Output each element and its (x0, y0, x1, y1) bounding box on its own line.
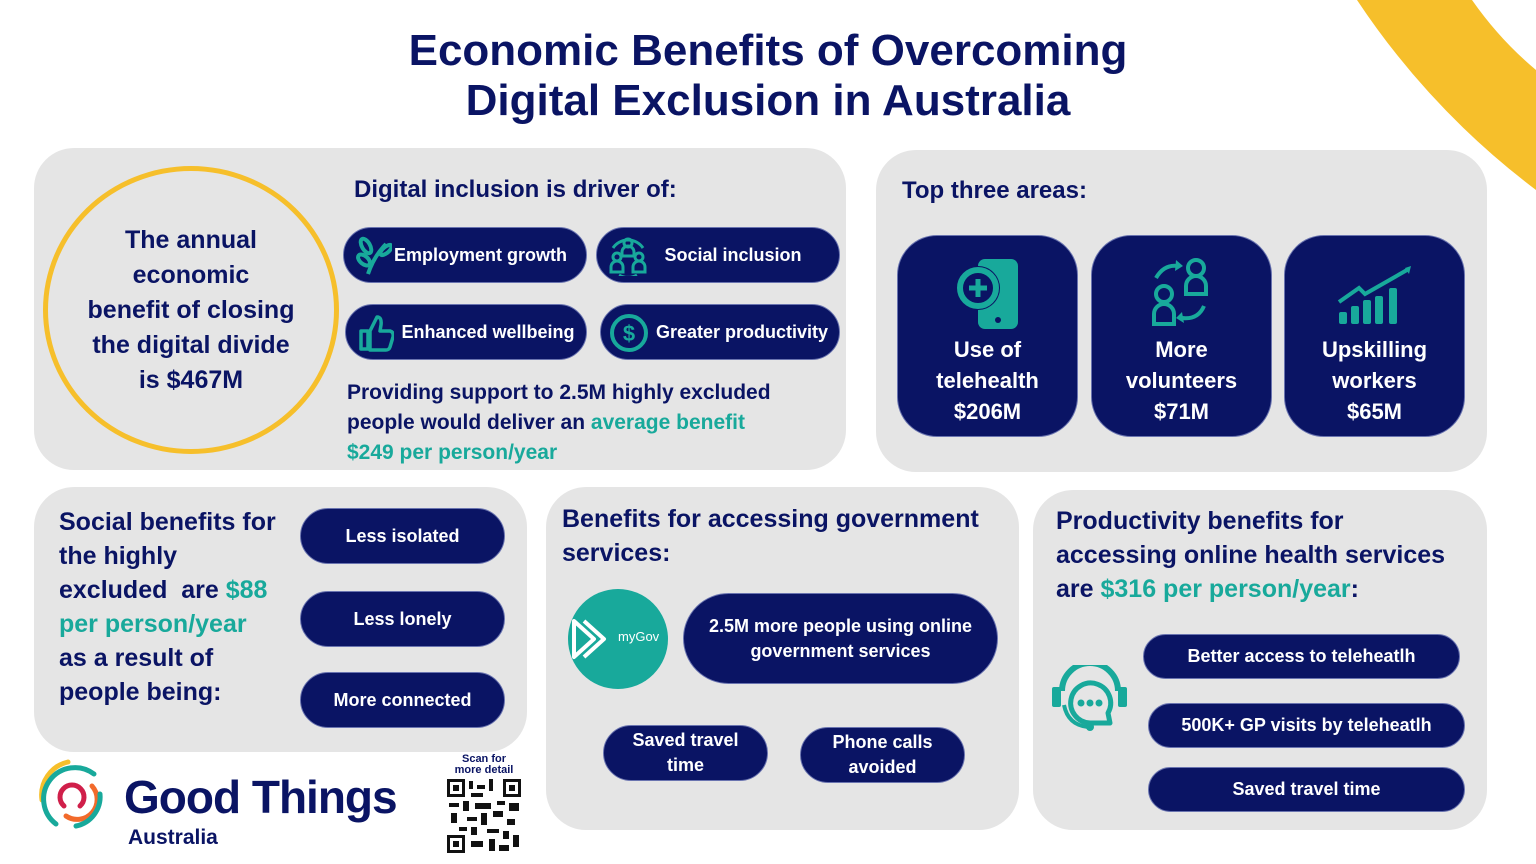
pill: more connected: More connected (333, 690, 472, 710)
pill: 2.5M more people: 2.5M more people using online (709, 616, 972, 636)
heading: Digital inclusion is driver of: (354, 176, 677, 203)
card: volunteers: volunteers (1126, 368, 1237, 393)
panel: digital inclusion (34, 148, 846, 470)
title: Economic Benefits of Overcoming (409, 26, 1127, 75)
yellow circle callout: benefit of closing (88, 296, 294, 324)
pill: less lonely (300, 591, 505, 647)
pill: phone calls avoided: Phone calls (832, 732, 933, 752)
heading: Top three areas: (902, 177, 1087, 204)
pill: less lonely: Less lonely (353, 608, 452, 628)
text block: people being: (59, 678, 222, 706)
pill: less isolated (300, 508, 505, 564)
decorative yellow arc (1357, 0, 1536, 190)
card: telehealth: telehealth (936, 368, 1039, 393)
card: upskilling (1284, 235, 1465, 437)
card: telehealth: $206M (954, 399, 1021, 424)
heading (1056, 507, 1445, 603)
yellow circle callout: the digital divide (92, 330, 290, 358)
card: telehealth: Use of (954, 337, 1021, 362)
heading (562, 505, 979, 567)
card: volunteers (1091, 235, 1272, 437)
pill: greater productivity (600, 304, 840, 360)
yellow circle callout: economic (133, 260, 249, 288)
pill: saved travel time: Saved travel (632, 730, 739, 750)
panel: productivity health (1033, 490, 1487, 830)
pill: 500K+ GP visits: 500K+ GP visits by teleheatlh (1181, 715, 1432, 735)
pill: 500K+ GP visits (1148, 703, 1465, 748)
pill: enhanced wellbeing (345, 304, 587, 360)
logo: good things australia (39, 760, 397, 849)
pill: better access: Better access to teleheatlh (1187, 646, 1416, 666)
yellow circle callout: The annual (125, 226, 257, 254)
panel: top three areas (876, 150, 1487, 472)
pill: social inclusion (596, 227, 840, 283)
card: upskilling: workers (1332, 368, 1417, 393)
card: upskilling: Upskilling (1322, 337, 1427, 362)
qr code: Scan for (462, 753, 506, 765)
text block: support (347, 381, 771, 464)
pill: 2.5M more people (683, 593, 998, 684)
heading: accessing online health services (1056, 541, 1445, 569)
pill: social inclusion: Social inclusion (664, 244, 802, 264)
title (409, 26, 1127, 125)
icon: mygov: myGov (618, 629, 659, 644)
yellow circle callout: is $467M (139, 366, 243, 394)
pill: employment growth: Employment growth (394, 244, 567, 264)
qr code (447, 753, 521, 853)
text block: per person/year (59, 610, 247, 638)
heading: are $316 per person/year: (1056, 575, 1359, 603)
panel: social benefits (34, 487, 527, 752)
logo: good things australia: Good Things (124, 771, 397, 823)
yellow circle callout (43, 166, 339, 454)
icon: headset (1052, 665, 1127, 731)
heading: services: (562, 539, 670, 567)
panel: government services (546, 487, 1019, 830)
pill: employment growth (343, 227, 587, 283)
text block: support: $249 per person/year (347, 441, 557, 464)
text block: support: Providing support to 2.5M highly excluded (347, 381, 771, 404)
heading: Benefits for accessing government (562, 505, 979, 533)
pill: better access (1143, 634, 1460, 679)
pill: less isolated: Less isolated (345, 526, 460, 546)
pill: more connected (300, 672, 505, 728)
qr code: more detail (455, 764, 513, 776)
title: Digital Exclusion in Australia (466, 76, 1070, 125)
logo: good things australia: Australia (128, 826, 218, 849)
text block (59, 508, 276, 706)
pill: phone calls avoided: avoided (848, 757, 916, 777)
card: telehealth (897, 235, 1078, 437)
text block: the highly (59, 542, 177, 570)
pill: saved travel time (603, 725, 768, 781)
text block: Social benefits for (59, 508, 276, 536)
pill: 2.5M more people: government services (750, 640, 931, 660)
heading: Productivity benefits for (1056, 507, 1344, 535)
card: upskilling: $65M (1347, 399, 1402, 424)
pill: greater productivity: Greater productivity (656, 322, 828, 342)
text block: support: people would deliver an average benefit (347, 411, 745, 434)
text block: excluded are $88 (59, 576, 267, 604)
icon: mygov (568, 589, 668, 689)
text block: as a result of (59, 644, 213, 672)
pill: greater productivity: $ (623, 321, 635, 346)
card: volunteers: $71M (1154, 399, 1209, 424)
pill: enhanced wellbeing: Enhanced wellbeing (401, 322, 575, 342)
card: volunteers: More (1155, 337, 1208, 362)
pill: phone calls avoided (800, 727, 965, 783)
pill: saved travel time (1148, 767, 1465, 812)
pill: saved travel time: time (667, 755, 704, 775)
pill: saved travel time: Saved travel time (1232, 779, 1381, 799)
